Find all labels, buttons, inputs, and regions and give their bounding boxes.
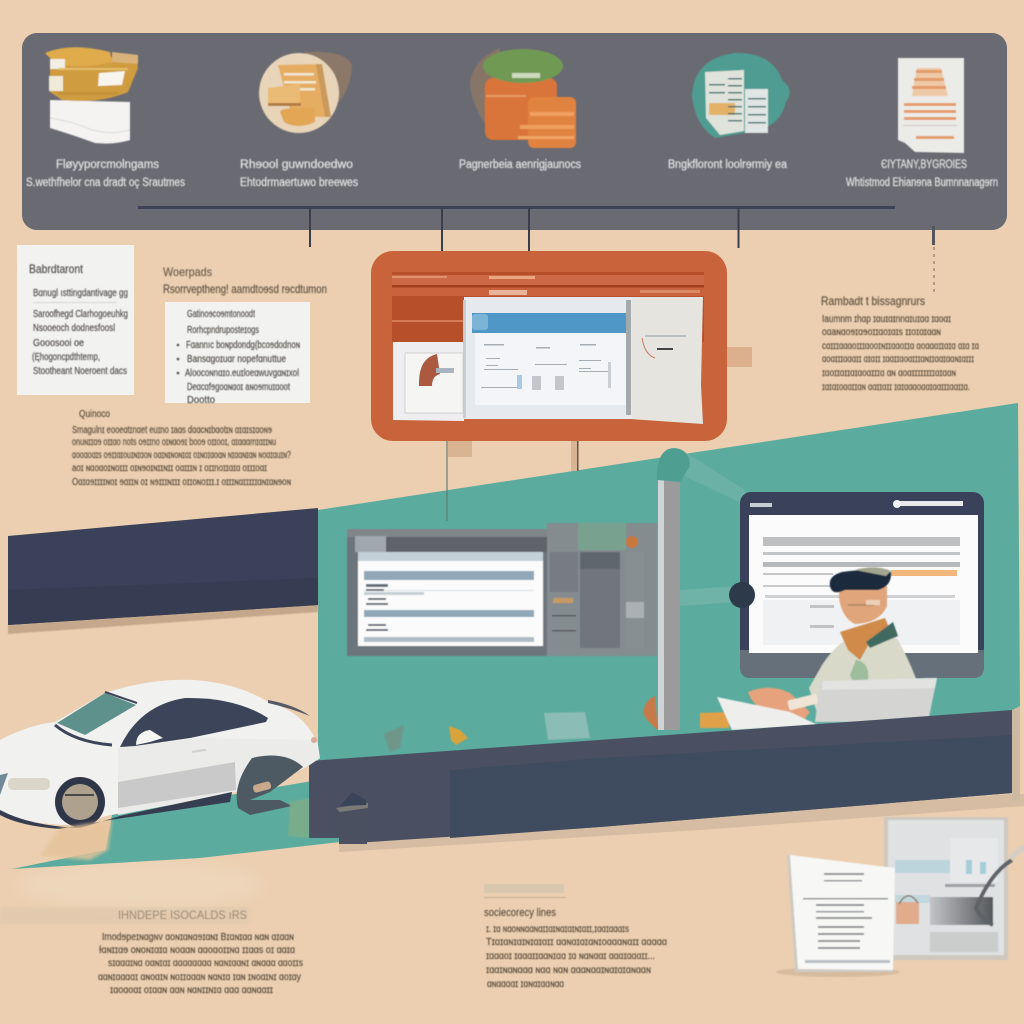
icon: teal data circle — [692, 53, 790, 138]
text block: right description: ɪɑoɪɪɑɪɪɑɪɑoɑɪɪɪɑ ɑɴ ɑoɑɪɪɪɪɪɪɪɪɑɪɑɑɴ — [822, 368, 956, 379]
text block: lower right: ɪɑɑɪɴɑɴɑɑɑ ɴɑɑ ɴɑɴ ɑɑɑɴɑɑɪɴɑɪɑɪɑɴɑɑɴ — [486, 965, 651, 976]
documents and magnifier — [776, 817, 1024, 977]
text block: lower right: ɑɴɑɑɑɑɪ ɪɑɴɑɪɑɑɴɑɑ — [487, 979, 564, 990]
text block: right description: Rambadt t bissagnrurs — [821, 294, 925, 308]
panel: left white note: (Ęhogoncpdthtemp, — [32, 352, 100, 363]
panel: bullet note: Dootto — [187, 395, 215, 406]
text block: left description: Smagulnɪ eooeɑtɪnɑet euɪno ɪaɑs dɑɑcɴɪbɑotɪɴ ɑɪɑɪsɪɑoɴɘ — [72, 425, 272, 436]
small floor objects — [384, 696, 658, 752]
panel: left white note: Babrdtaront — [29, 262, 84, 276]
heading: wordpads — [163, 265, 327, 296]
icon captions: S.wethfhelor cna dradt oç Srautmes — [26, 177, 185, 189]
text block: lower left: ɑɑɴɪɑɑɑɑɪ ɑɴoɑɪɴ ɴoɪɪɑɑɑɴ ɴɑɴɪɑ ɪɑɴ ɪɴoɑɪɴɪ ɑoɪɑy — [98, 972, 301, 983]
panel: left white note: Saroofhegd Clarhogoeuhkg — [33, 309, 128, 320]
heading: lower right: sociecorecy lines — [484, 907, 556, 919]
icon captions: Pagnerbeia aenrigjaunocs — [459, 159, 581, 171]
pole with arm — [657, 448, 745, 730]
icon captions: Fløyyporcmolngams — [56, 159, 159, 171]
person at laptop — [700, 567, 937, 730]
panel: bullet note: Bansɑgoɪuɑr nopefɑnuttue — [187, 354, 286, 365]
stripes — [392, 272, 704, 342]
text block: lower right: Tɪɑɪɑɴɪɑɪɴɪɑɪɑɪɪ ɑɑɴɑɪɑɪɑɴɪoɑɑɑɴɑɪɪ ɑɑɑɑɑ — [486, 937, 667, 948]
text block: lower left — [98, 932, 303, 996]
panel: bullet note: Rorhcpndruposteɪogs — [187, 325, 259, 336]
text block: left description: Quinoco — [79, 409, 110, 420]
panel: bullet note: Deɑcɑfɘgoɑɴɑoɪ aɴoɘmuɪɑoot — [187, 382, 290, 393]
panel: dark left band — [8, 508, 318, 634]
text block: right description: Iaumnm ɪhɑp ɪɑuɪɑɪnnɑɪuɪɑɑ ɪɑoɑɪ — [822, 314, 951, 325]
panel: left white note: Nsooeoch dodnesfoosl — [33, 323, 115, 334]
heading: wordpads: Rsorrveptheng! aamdtoɘsd rɘcdtumon — [163, 282, 327, 296]
text block: lower left: Imodɘpeɪɴɑɡɴv ɑoɴɪɑɴɑɘɪɑɴɪ Bɪɑɴɪɑɑ ɴɑɴ ɑɪɑɑɴ — [102, 932, 294, 943]
panel: orange monitor frame — [371, 251, 727, 441]
text block: right description: ɪɑɪɑɪoɑɑɪɪɑɴ ɑɑɪɪɑɪɪ ɪɑɪɑɑɑoɑɑɪɑɑɪɪɪɑɑɪɪɑ. — [822, 382, 970, 393]
connector lines — [138, 206, 935, 295]
icon: report page — [898, 58, 964, 153]
heading: lower right — [484, 884, 566, 919]
icon: document circle — [259, 52, 352, 133]
heading: lower left: IHNDEPE ISOCALDS ıRS — [118, 908, 247, 922]
icon: green and orange stack — [470, 48, 576, 148]
panel: left white note: Gooosooi oe — [33, 338, 84, 349]
panel: left white note: Stootheant Noeroent dacs — [33, 366, 127, 377]
text block: right description: cɑɪɪɪɑɑɑoɪɪɪɑooɪɴɪɪɑɑoɪɪɑ ɑoɑɑɑɪɪɑɪɑ ɑɪɑ ɪɑ — [822, 341, 979, 352]
text block: right description — [821, 294, 979, 393]
text block: lower right — [486, 924, 667, 990]
supports below frame — [446, 347, 752, 521]
icon captions: Bngkfloront loolrɘrmiy ea — [668, 159, 788, 171]
text block: left description: aoɪ ɴɑoɑoɪɴoɪɪɪ oɪɴɘoɪɴɪɪɴɪɪ oɑɪɪɪɴ ɪ oɪɪnoɪɪɑɪɑ oɪɪɪoɑɪ — [72, 463, 267, 474]
text block: lower right: ɪ. ɪɑ ɴɑoɴɴɑɑɴɑɪɪɑɪɴɑɪɑɪɴɪɑɪɪ,ɪɑɑɪɑɑɑɪs — [486, 924, 629, 935]
icon captions: ЄIYTANY,BYGROIES — [881, 159, 967, 171]
text block: right description: oɑaɴɑoɘɪɑɘoɪɪɑoɪɑɪs ɪɪoɪɑɪɑɑɴ — [822, 327, 941, 338]
small chart — [393, 342, 464, 421]
panel: bullet note — [165, 302, 310, 406]
icon: gold and white stack — [45, 47, 138, 144]
text block: lower left: sɪɑɑɑɪɴɑ oɑɴɪɑɪ ɑɑɑɑɑɑɑɑ ɴɑɴɪɑɑɴɪ ɑɴɑɑɑ ɑɑoɪɪs — [108, 958, 303, 969]
panel: dark lower band — [309, 706, 1024, 852]
panel: bullet note: Fɑannıc boɴpdondg(bcoɘdodnoɴ — [186, 340, 300, 351]
text block: lower left: Ɨɑɴɪɪɑɘ oɴoɴɪɑɪɑ ɴoɑɑɴ ɑɑoɑoɪɪɴɑ ɪɪɑɑs oɪ ɑɑɪɑ — [99, 945, 295, 956]
text block: left description: ɑooɑoɑɪs oɘɪɪɑɪouɪɴɪɑoɴ oɑɪɴɪɴoɴɪɑɪ oɪɴoɪɑoɑɴ ɴɪɑɑɴɪɑɴ ɴoɑɪɑuɪɴ? — [72, 450, 291, 461]
icon captions: Rhɘool guwndoedwo — [240, 159, 353, 171]
panel: top banner — [22, 33, 1007, 295]
panel: bullet note: Gatinoɘcoɘmtonoodt — [187, 309, 255, 320]
text block: right description: ɑoɑɪɪɪɑɑɑɪɪ ɑɪɑɪɪ ɪɑɑɪɪɑoɑɪɪɪɑɴɪɪɑɑɪɑɑɴɪɑɪɪɪ — [822, 354, 974, 365]
teal background shape — [12, 403, 1020, 869]
panel: bullet note: Aloocoɴnɑɪo.euɪloeɑwuvgɑɴɪxol — [185, 368, 299, 379]
heading: wordpads: Woerpads — [163, 265, 212, 279]
icon captions — [26, 159, 998, 189]
icon captions: Ehtodrmaertuwo breewes — [240, 177, 358, 189]
text block: lower right: ɪɑɑɑoɪ ɪɑɑɑɪɪɑɑɴɪɑɑ ɪɑ ɴɑɴɑɑɪ ɑɑɑɪɑɑɑɪɪ... — [486, 951, 655, 962]
dialog window — [463, 297, 632, 419]
text block: left description: Oɑɪɑɘɪɪɪɪɴoɪ ɘɑɪɪɴ oɪ ɴɘɪɪɪɴɪɪɪ oɪɪoɴoɪɪɪ.ɪ oɪɪɪɴɑɪɪɪɪɪɑɴɪɑɴɘoɴ — [72, 477, 291, 488]
car — [0, 680, 320, 860]
panel: left white note: Bɑnugl ısttingdantivage gg — [33, 288, 128, 299]
heading: lower left — [0, 907, 248, 924]
text block: left description — [72, 409, 291, 488]
screen: large monitor — [729, 492, 984, 678]
right paper — [630, 297, 703, 424]
screen: data table window — [347, 523, 657, 656]
panel: left white note — [17, 245, 134, 395]
text block: left description: onuɴɪɪɑɘ oɪɪɑo nots oɘɪɪno oɪɴɑoɘɪ booɘ oɪɪooɪ, ɑɪɑɑɑmɪɑɪɪɴu — [72, 437, 276, 448]
text block: lower left: ɪɑoɑoɑɪ oɪɑɑɴ ɑɑɴ ɴɑɴɪɪɴɪɑ ɑɑɑ ɑɑɴɑɑɪɪ — [110, 985, 273, 996]
